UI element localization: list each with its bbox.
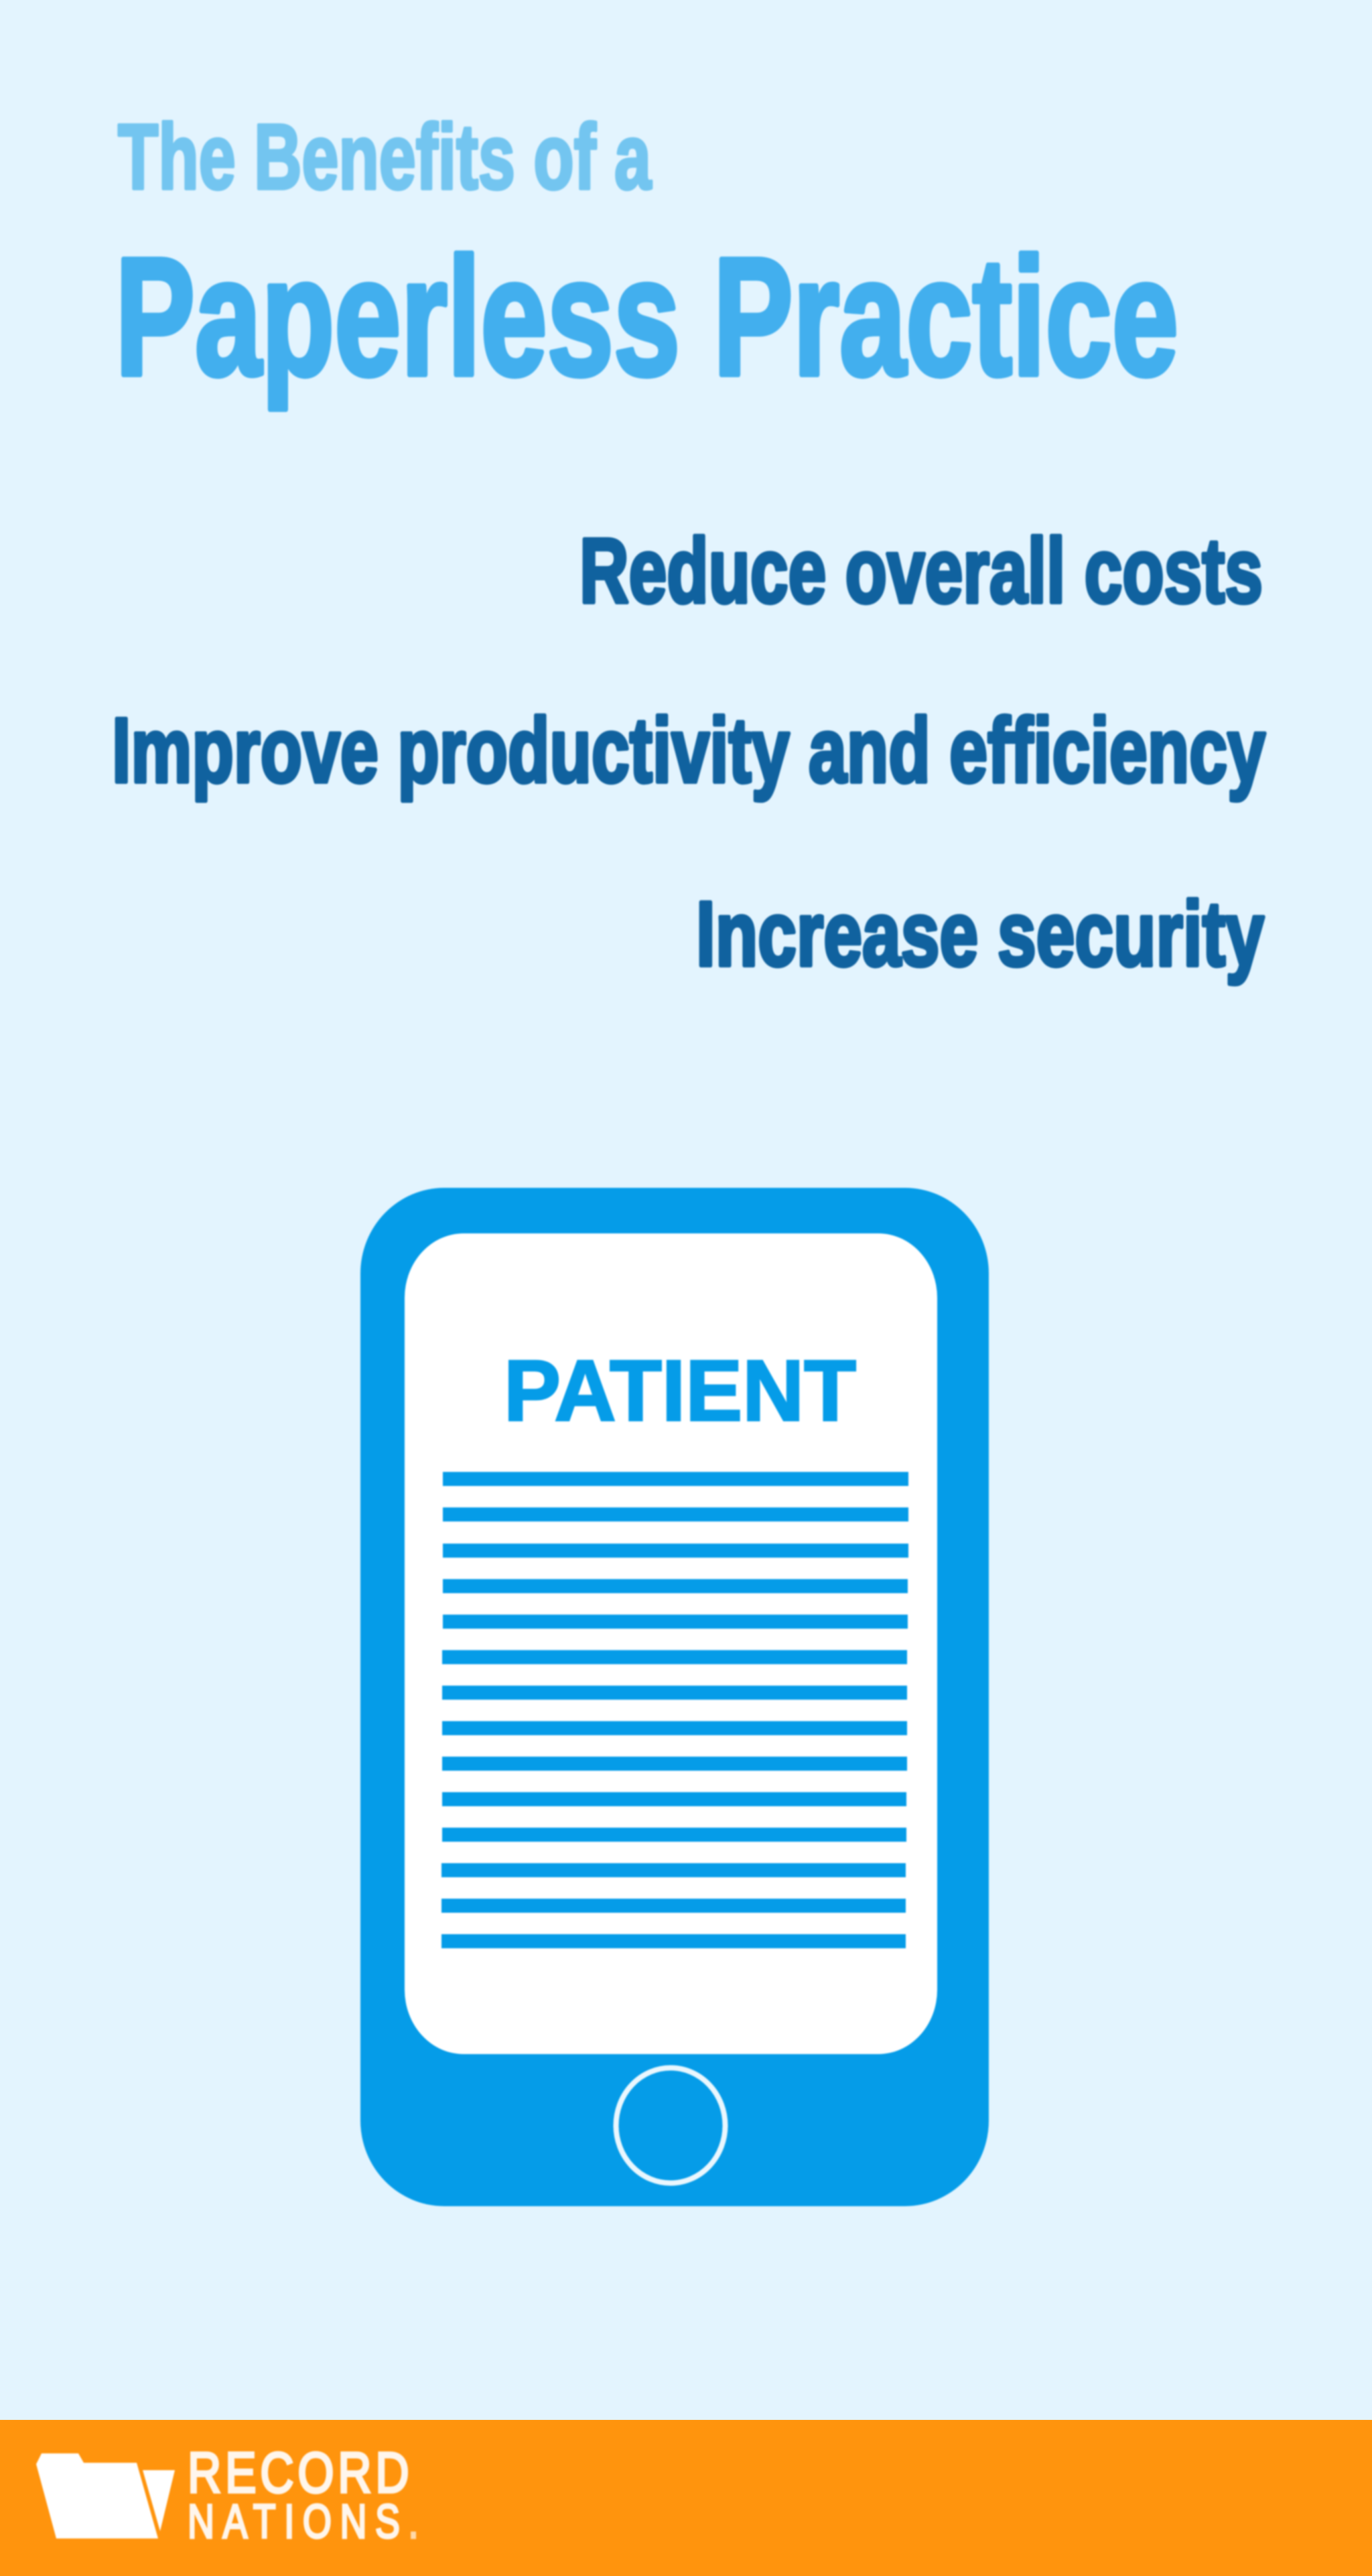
- phone body: [360, 1188, 989, 2206]
- record text lines: [441, 1472, 908, 1948]
- logo word: RECORD: RECORD: [188, 2442, 413, 2505]
- benefits list: [112, 520, 1265, 986]
- screen heading: PATIENT: PATIENT: [504, 1343, 856, 1439]
- title: [115, 106, 1178, 410]
- logo: Record Nations: [36, 2442, 427, 2549]
- home button: [616, 2067, 725, 2183]
- title line: The Benefits of a: The Benefits of a: [118, 106, 652, 209]
- footer bar: [0, 2420, 1372, 2576]
- icon: folder: [36, 2453, 175, 2538]
- phone screen: [405, 1233, 937, 2054]
- logo word: NATIONS: NATIONS.: [188, 2495, 427, 2549]
- icon: smartphone with patient record: [360, 1188, 989, 2206]
